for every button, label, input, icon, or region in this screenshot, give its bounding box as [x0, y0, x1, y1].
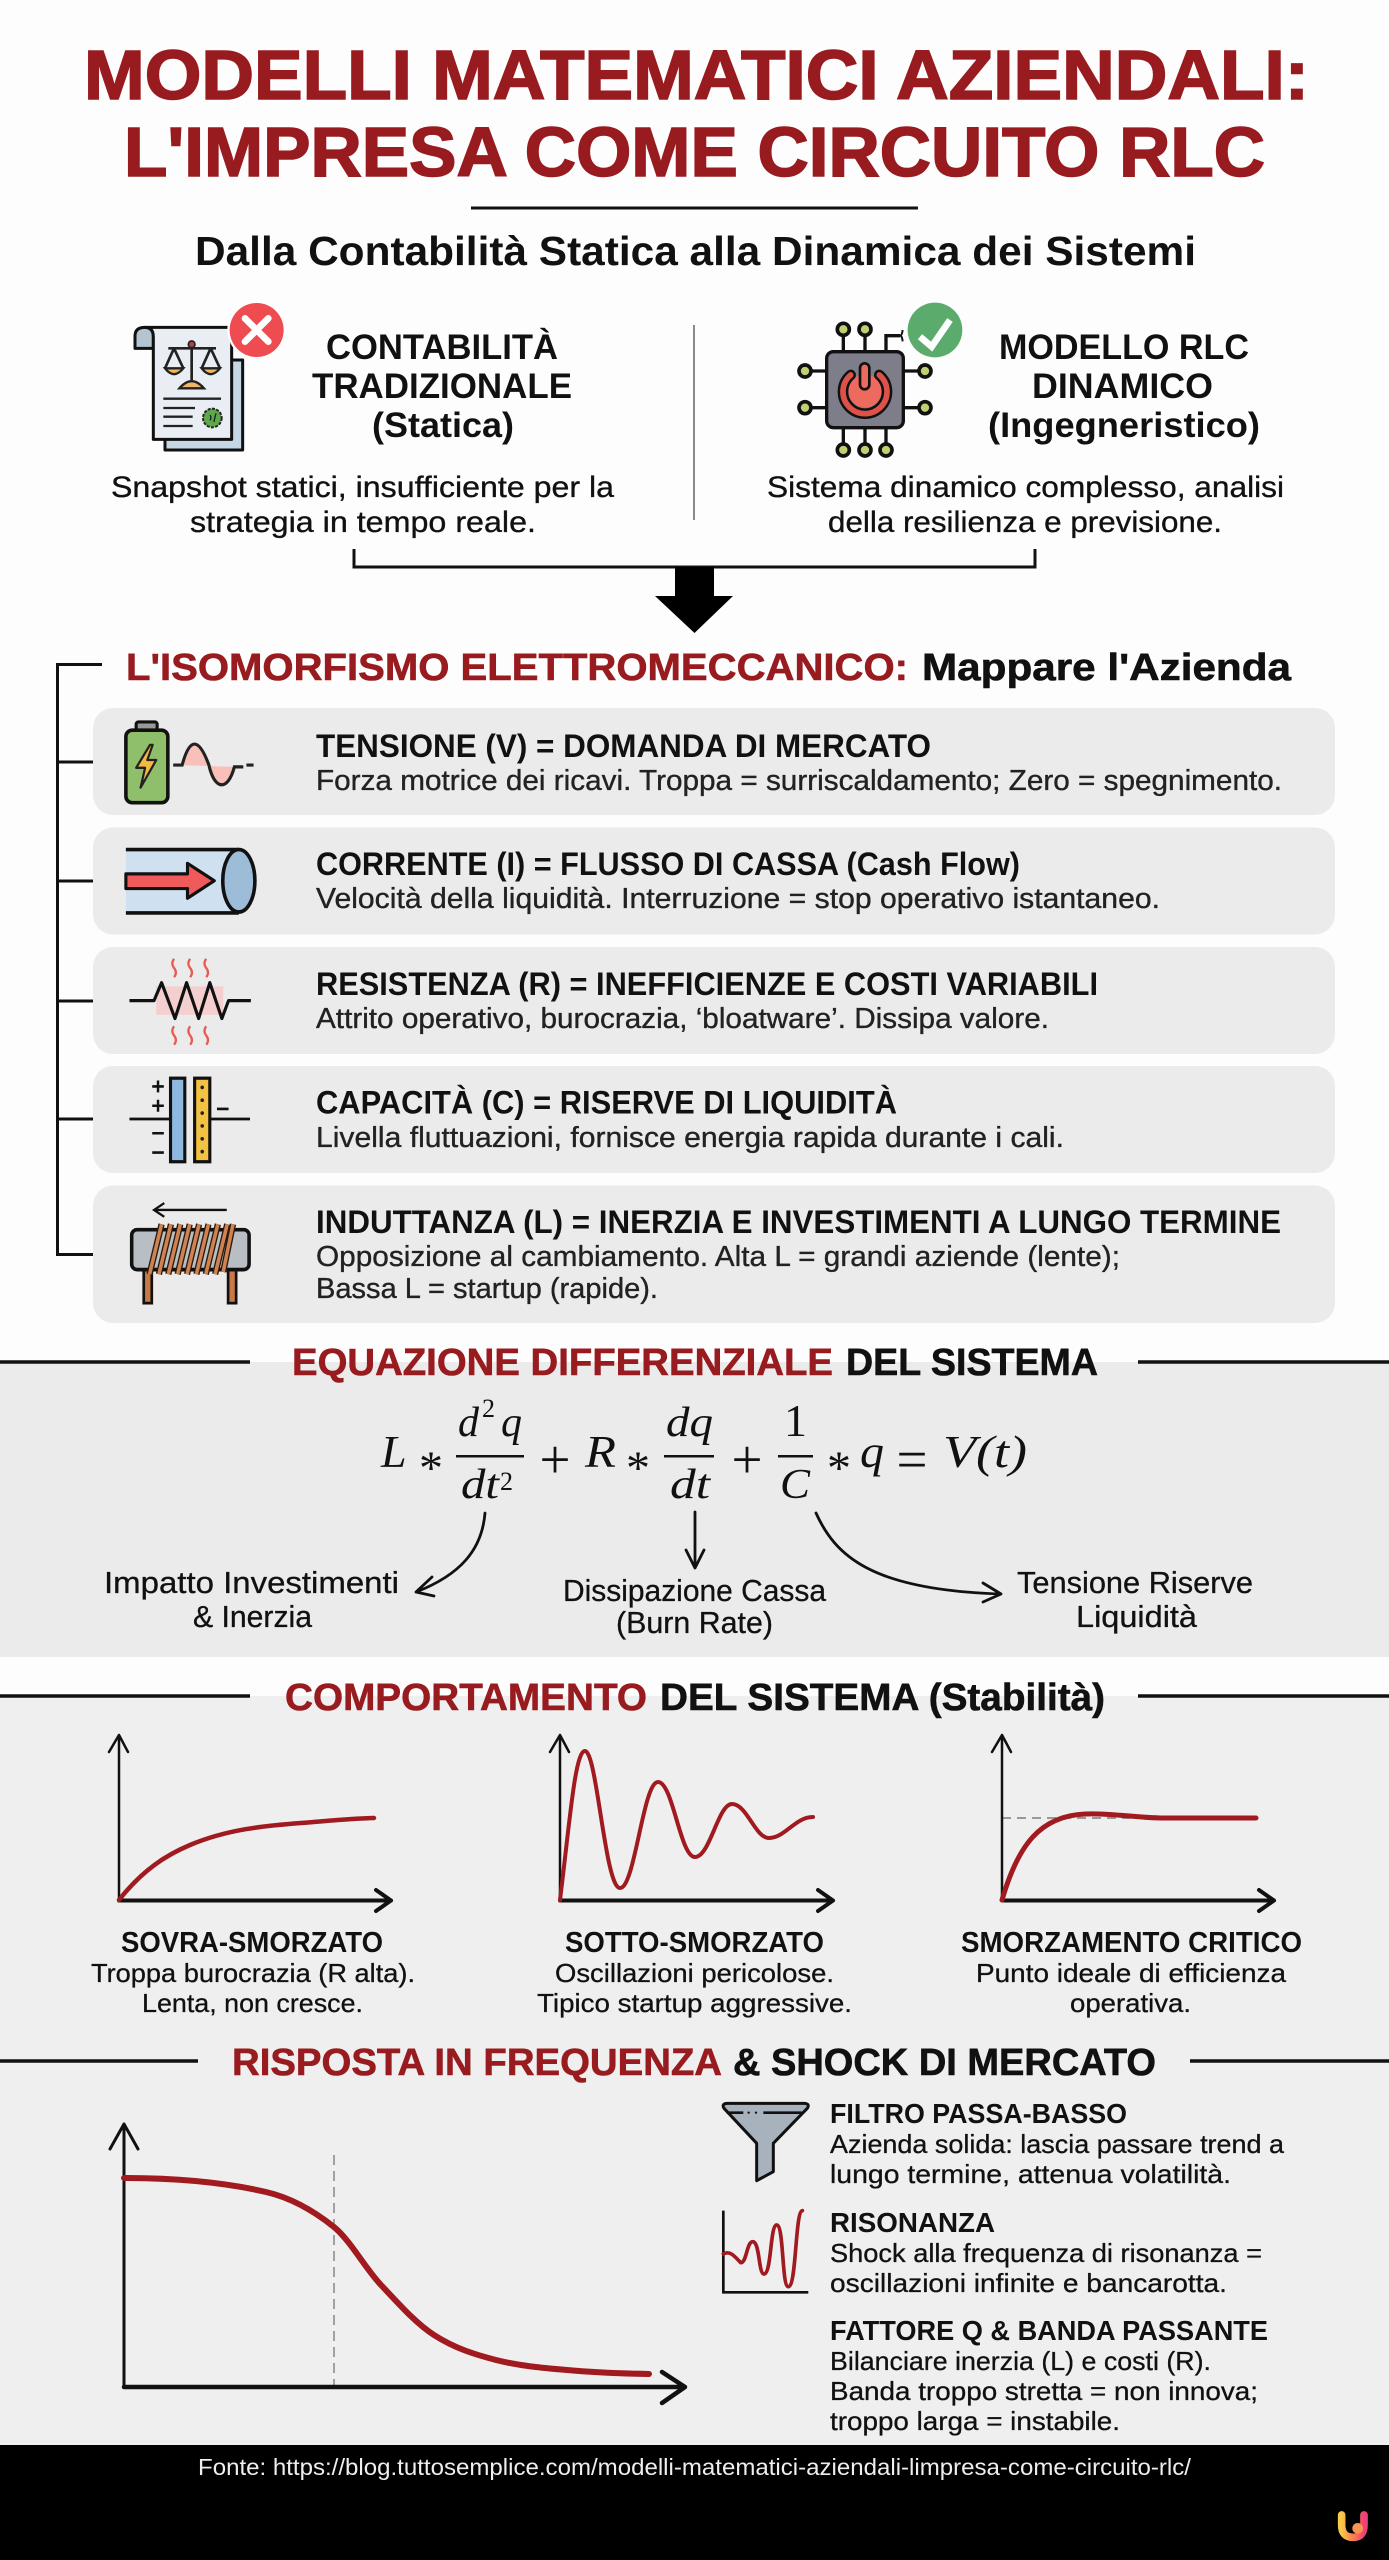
icon: pipe and arrow	[126, 850, 255, 913]
title: MODELLI MATEMATICI AZIENDALI:	[84, 36, 1309, 114]
text: over-damped: Troppa burocrazia (R alta).	[91, 1958, 415, 1988]
equation: *	[419, 1442, 443, 1495]
text: inductance	[316, 1204, 1281, 1305]
text: traditional accounting description: Snapshot statici, insufficiente per la	[111, 471, 614, 504]
text: resonance: Shock alla frequenza di risonanza =	[830, 2238, 1262, 2268]
text: dynamic RLC model description: della resilienza e previsione.	[828, 506, 1222, 539]
text: critical damping: SMORZAMENTO CRITICO	[961, 1927, 1302, 1959]
chart: under-damped	[550, 1735, 833, 1911]
arrow: to investments impact	[416, 1513, 485, 1596]
text: resonance: RISONANZA	[830, 2207, 995, 2238]
equation: 2	[482, 1394, 495, 1423]
equation: dt	[670, 1462, 712, 1508]
equation: R	[584, 1426, 616, 1477]
text: over-damped	[91, 1927, 415, 2018]
text: capacitance: CAPACITÀ (C) = RISERVE DI LIQUIDITÀ	[316, 1084, 897, 1120]
heading: differential equation: EQUAZIONE DIFFERENZIALE	[292, 1342, 833, 1384]
equation: V(t)	[943, 1426, 1027, 1477]
text: over-damped: SOVRA-SMORZATO	[121, 1927, 383, 1959]
equation: +	[539, 1429, 571, 1490]
equation: *	[626, 1442, 650, 1495]
chart: over-damped	[109, 1735, 391, 1911]
icon: funnel	[723, 2103, 808, 2181]
heading: dynamic RLC model	[988, 328, 1260, 445]
heading: differential equation	[292, 1342, 1098, 1384]
chart: low-pass response	[110, 2124, 685, 2403]
heading: traditional accounting: TRADIZIONALE	[312, 367, 572, 406]
label: cash dissipation: Dissipazione Cassa	[563, 1573, 827, 1608]
heading: dynamic RLC model: (Ingegneristico)	[988, 406, 1260, 445]
arrow: to cash dissipation	[686, 1512, 704, 1568]
equation: =	[896, 1429, 928, 1490]
heading: system behaviour: COMPORTAMENTO	[285, 1677, 647, 1719]
equation: d	[458, 1400, 480, 1446]
text: under-damped: SOTTO-SMORZATO	[565, 1927, 824, 1959]
text: inductance: Bassa L = startup (rapide).	[316, 1273, 658, 1305]
icon: inductor coil	[132, 1203, 249, 1303]
text: current: Velocità della liquidità. Interruzione = stop operativo istantaneo.	[316, 883, 1160, 915]
text: voltage	[316, 728, 1282, 797]
equation: dq	[666, 1400, 713, 1446]
text: under-damped: Tipico startup aggressive.	[537, 1988, 852, 2018]
panel: differential equation	[0, 1340, 1389, 1657]
panel: frequency response	[0, 2042, 1389, 2445]
label: reserve voltage: Liquidità	[1076, 1599, 1198, 1634]
heading: dynamic RLC model: MODELLO RLC	[999, 328, 1249, 367]
label: reserve voltage: Tensione Riserve	[1017, 1565, 1253, 1600]
source text: Fonte: https://blog.tuttosemplice.com/modelli-matematici-aziendali-limpresa-come-circuito-rlc/	[198, 2454, 1192, 2480]
equation: C	[780, 1462, 811, 1508]
equation	[380, 1394, 1027, 1508]
panel: inductance row	[93, 1186, 1335, 1323]
text: resonance	[830, 2207, 1262, 2298]
equation: *	[827, 1442, 851, 1495]
label: reserve voltage	[1017, 1565, 1253, 1634]
text: inductance: Opposizione al cambiamento. Alta L = grandi aziende (lente);	[316, 1241, 1120, 1273]
panel: resistance row	[93, 947, 1335, 1054]
text: traditional accounting description	[111, 471, 614, 539]
text: low-pass filter: lungo termine, attenua volatilità.	[830, 2159, 1231, 2189]
panel: current row	[93, 828, 1335, 934]
footer	[0, 2445, 1389, 2560]
text: resistance	[316, 966, 1098, 1035]
icon: resonance chart	[723, 2211, 808, 2292]
text: current	[316, 846, 1160, 915]
panel: dynamic RLC model	[767, 303, 1284, 539]
label: cash dissipation	[563, 1573, 827, 1640]
text: current: CORRENTE (I) = FLUSSO DI CASSA (Cash Flow)	[316, 846, 1020, 882]
heading: traditional accounting: CONTABILITÀ	[326, 327, 558, 367]
text: low-pass filter: FILTRO PASSA-BASSO	[830, 2098, 1127, 2129]
heading: dynamic RLC model: DINAMICO	[1032, 367, 1213, 406]
heading: isomorphism	[126, 647, 1292, 689]
text: under-damped	[537, 1927, 852, 2018]
equation: +	[731, 1429, 763, 1490]
icon: capacitor	[129, 1078, 250, 1162]
title: L'IMPRESA COME CIRCUITO RLC	[124, 113, 1265, 191]
text: critical damping: Punto ideale di efficienza	[976, 1958, 1287, 1988]
arrow: to reserve voltage	[816, 1513, 1001, 1602]
equation: 2	[500, 1467, 513, 1496]
text: resistance: Attrito operativo, burocrazia, ‘bloatware’. Dissipa valore.	[316, 1003, 1049, 1035]
arrow: bracket and down arrow	[354, 549, 1035, 633]
icon: chip with green check	[799, 303, 962, 456]
title	[84, 36, 1309, 191]
text: Q factor and bandwidth: Banda troppo stretta = non innova;	[830, 2376, 1258, 2406]
text: Q factor and bandwidth: FATTORE Q & BANDA PASSANTE	[830, 2315, 1268, 2346]
text: voltage: TENSIONE (V) = DOMANDA DI MERCATO	[316, 728, 931, 764]
heading: system behaviour	[285, 1677, 1105, 1719]
heading: traditional accounting: (Statica)	[372, 406, 514, 445]
heading: frequency response: & SHOCK DI MERCATO	[733, 2042, 1156, 2084]
panel: traditional accounting	[111, 301, 614, 539]
panel: voltage row	[93, 708, 1335, 815]
text: traditional accounting description: strategia in tempo reale.	[190, 506, 536, 539]
subtitle: Dalla Contabilità Statica alla Dinamica dei Sistemi	[195, 228, 1196, 274]
heading: isomorphism: L'ISOMORFISMO ELETTROMECCANICO:	[126, 647, 908, 689]
heading: differential equation: DEL SISTEMA	[846, 1342, 1098, 1384]
text: capacitance	[316, 1084, 1064, 1154]
icon: logo	[1342, 2515, 1364, 2537]
heading: traditional accounting	[312, 327, 572, 445]
chart: critical damping	[992, 1735, 1274, 1911]
label: investments impact: Impatto Investimenti	[104, 1565, 399, 1600]
label: investments impact: & Inerzia	[193, 1599, 313, 1634]
text: inductance: INDUTTANZA (L) = INERZIA E INVESTIMENTI A LUNGO TERMINE	[316, 1204, 1281, 1240]
text: Q factor and bandwidth: Bilanciare inerzia (L) e costi (R).	[830, 2346, 1211, 2376]
label: cash dissipation: (Burn Rate)	[616, 1605, 773, 1640]
text: dynamic RLC model description: Sistema dinamico complesso, analisi	[767, 471, 1284, 504]
heading: isomorphism: Mappare l'Azienda	[922, 647, 1292, 689]
heading: system behaviour: DEL SISTEMA (Stabilità)	[660, 1677, 1105, 1719]
text: capacitance: Livella fluttuazioni, fornisce energia rapida durante i cali.	[316, 1122, 1064, 1154]
text: voltage: Forza motrice dei ricavi. Troppa = surriscaldamento; Zero = spegnimento.	[316, 765, 1282, 797]
equation: q	[501, 1400, 522, 1446]
equation: dt	[461, 1462, 501, 1508]
text: Q factor and bandwidth: troppo larga = instabile.	[830, 2406, 1120, 2436]
text: critical damping: operativa.	[1070, 1988, 1191, 2018]
icon: battery and wave	[126, 722, 254, 803]
text: resonance: oscillazioni infinite e bancarotta.	[830, 2268, 1227, 2298]
icon: legal document with red cross	[135, 301, 286, 450]
text: over-damped: Lenta, non cresce.	[142, 1988, 363, 2018]
icon: resistor with heat	[129, 959, 251, 1045]
heading: frequency response: RISPOSTA IN FREQUENZA	[232, 2042, 722, 2084]
equation: 1	[784, 1395, 807, 1446]
equation: L	[380, 1426, 407, 1477]
heading: frequency response	[232, 2042, 1156, 2084]
text: resistance: RESISTENZA (R) = INEFFICIENZE E COSTI VARIABILI	[316, 966, 1098, 1002]
text: under-damped: Oscillazioni pericolose.	[555, 1958, 834, 1988]
panel: capacitance row	[93, 1066, 1335, 1173]
panel: system behaviour	[0, 1675, 1389, 2046]
label: investments impact	[104, 1565, 399, 1634]
equation: q	[860, 1426, 884, 1477]
text: Q factor and bandwidth	[830, 2315, 1268, 2436]
text: low-pass filter: Azienda solida: lascia passare trend a	[830, 2129, 1285, 2159]
text: dynamic RLC model description	[767, 471, 1284, 539]
text: critical damping	[961, 1927, 1302, 2018]
text: low-pass filter	[830, 2098, 1285, 2189]
